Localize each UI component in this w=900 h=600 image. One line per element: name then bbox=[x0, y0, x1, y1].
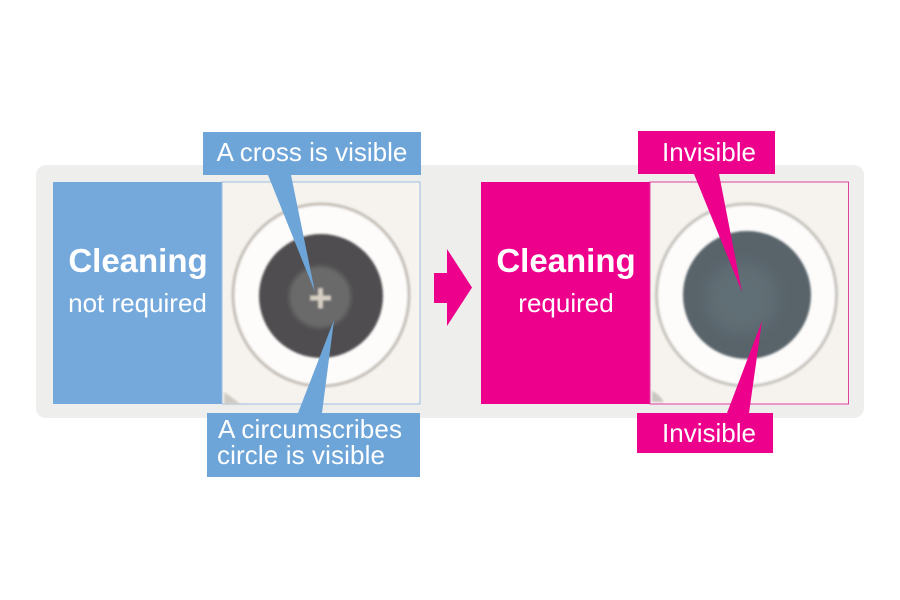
heading: Cleaning: Cleaning bbox=[496, 242, 636, 279]
panel: cleaning required bbox=[481, 182, 848, 404]
callout: a cross is visible: A cross is visible bbox=[217, 137, 407, 167]
arrow bbox=[434, 249, 472, 326]
callout: a circumscribes circle is visible bbox=[207, 320, 420, 477]
callout: a circumscribes circle is visible: A circumscribes bbox=[218, 414, 402, 444]
panel: cleaning not required bbox=[53, 182, 420, 404]
pink label block bbox=[481, 182, 650, 404]
photo: clean sensor with visible cross bbox=[222, 182, 420, 404]
subheading: required: required bbox=[518, 288, 614, 318]
blue label block bbox=[53, 182, 222, 404]
photo: dirty sensor with nothing visible bbox=[650, 182, 848, 404]
background panel bbox=[36, 165, 864, 418]
callout: invisible top bbox=[638, 131, 775, 292]
callout: invisible bottom bbox=[637, 321, 773, 453]
callout: a circumscribes circle is visible: circle is visible bbox=[217, 440, 385, 470]
callout: invisible bottom: Invisible bbox=[662, 418, 756, 448]
subheading: not required: not required bbox=[68, 288, 207, 318]
callout: invisible top: Invisible bbox=[662, 137, 756, 167]
heading: Cleaning: Cleaning bbox=[68, 242, 208, 279]
callout: a cross is visible bbox=[203, 132, 421, 292]
